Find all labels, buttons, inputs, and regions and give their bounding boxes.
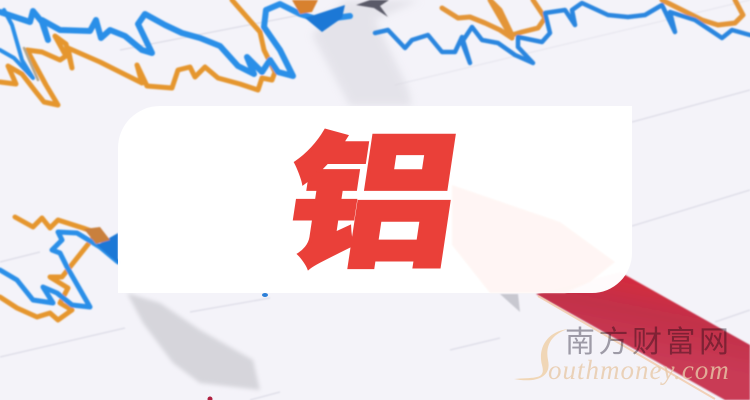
shadow of pen, lower — [127, 293, 260, 390]
orange patch — [292, 0, 318, 14]
line chart: lower left — [0, 217, 118, 320]
faint arrow inside panel — [452, 185, 615, 293]
title panel — [118, 106, 632, 293]
pushpin mark — [356, 0, 389, 17]
orange series upper right — [442, 0, 545, 38]
watermark swoosh — [514, 329, 568, 380]
blue series lower left — [0, 232, 118, 307]
watermark chinese name: 南方财富网 — [565, 326, 732, 359]
red mark at page bottom — [208, 396, 212, 400]
line chart: upper left — [0, 0, 350, 105]
pale overlap — [24, 48, 38, 80]
brown patch — [84, 227, 110, 244]
shadow of paper sheet, upper — [312, 0, 420, 106]
pencil: red body — [536, 272, 750, 400]
pencil tip — [500, 294, 520, 312]
blue series upper right — [375, 3, 750, 63]
blue series upper left — [0, 4, 350, 76]
orange series upper left — [0, 0, 275, 105]
dark blue patch — [97, 233, 118, 263]
pencil: light edge — [538, 296, 715, 399]
blue dot below panel — [262, 293, 268, 297]
watermark — [514, 326, 732, 385]
blue patch — [305, 5, 345, 32]
blue series lower strand — [0, 10, 33, 78]
orange series lower left — [0, 217, 97, 320]
watermark latin name: outhmoney.com — [548, 355, 730, 385]
title character: 铝 — [276, 123, 471, 285]
line chart: upper right — [375, 0, 750, 63]
